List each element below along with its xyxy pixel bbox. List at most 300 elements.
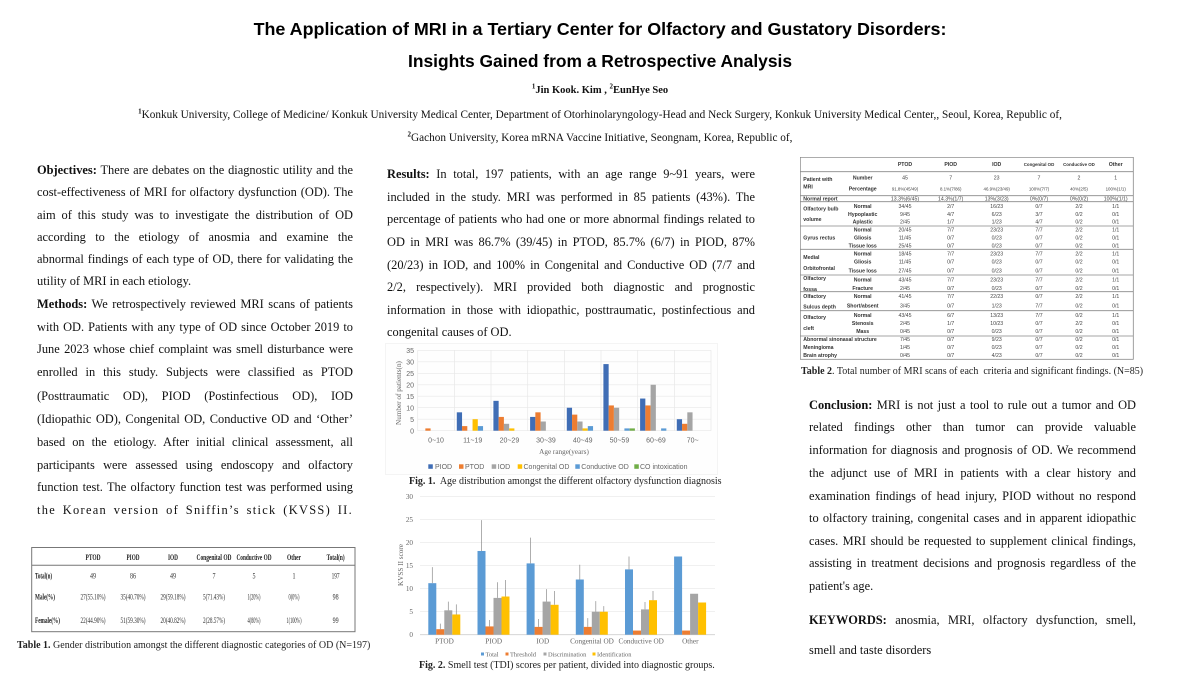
table 2 data rows: 1/1 (1112, 313, 1119, 319)
table 2 data rows: 0/7 (947, 353, 954, 359)
table 2 data rows: Aplastic (853, 220, 873, 226)
text block: keywords (809, 613, 1136, 657)
table 2 data rows: 7/7 (947, 278, 954, 284)
figure 2 legend (481, 651, 632, 658)
text block: methods: based on the etiology. After initial clinical assessment, all (37, 435, 353, 449)
table 2 data rows: 7/7 (1035, 252, 1043, 258)
table 2 data rows: 0/7 (1035, 329, 1043, 335)
figure 1 legend: PTOD (465, 464, 484, 471)
figure 2 legend: Discrimination (548, 651, 587, 658)
figure 1 x axis: 70~ (687, 438, 699, 444)
table 2 data rows: 2/45 (900, 321, 910, 327)
table 2 data rows (847, 175, 1128, 359)
text block: results: included in the study. MRI was performed in 85 patients (43%). The (387, 190, 755, 204)
text block: objectives: Objectives: There are debates on the diagnostic utility and the (37, 163, 353, 177)
table 2 data rows: 0/1 (1112, 268, 1119, 274)
text block: methods: Methods: We retrospectively reviewed MRI scans of patients (37, 297, 353, 311)
table 2 data rows: 1/1 (1112, 278, 1119, 284)
table 2 data rows: 9/23 (992, 337, 1002, 343)
table 2 data rows: 0/2 (1075, 345, 1083, 351)
table 2 data rows: 2 (1078, 175, 1081, 181)
table 1 row: total: 49 (170, 572, 176, 580)
figure 1 y axis: Number of patients(n) (395, 360, 403, 425)
table 2 data rows: 7/7 (947, 252, 954, 258)
figure 2: smell test scores bar chart (397, 493, 715, 658)
table 2 row labels: cleft (803, 326, 814, 332)
table 2 data rows: 4/23 (992, 353, 1002, 359)
authors: 1Jin Kook. Kim , 2EunHye Seo (532, 82, 668, 96)
table 2 data rows: 0/1 (1112, 337, 1119, 343)
text block: conclusion: related findings other than tumor can provide valuable (809, 420, 1136, 434)
table 2 data rows: 23/23 (990, 228, 1003, 234)
figure 1 y axis: 0 (410, 428, 414, 435)
figure 1 legend: IOD (498, 464, 510, 471)
table 1 row: total: 1 (292, 572, 296, 580)
table 2 row labels: Olfactory bulb (803, 206, 838, 212)
figure 2 legend: Identification (597, 651, 632, 658)
table 2 data rows: 0/2 (1075, 212, 1083, 218)
table 2 data rows: 0/2 (1075, 304, 1083, 310)
table 2 data rows: 7/7 (947, 294, 954, 300)
table 2 data rows: 1 (1114, 175, 1117, 181)
figure 1 bars (425, 364, 693, 431)
table 2 data rows: 7/45 (900, 337, 910, 343)
table 2 data rows: Mass (856, 329, 869, 335)
table 1 row: male: 5(71.43%) (203, 592, 225, 602)
table 1 row: total: 7 (212, 572, 216, 580)
text block: methods: participants were assessed using endoscopy and olfactory (37, 458, 353, 472)
figure 1 legend (428, 464, 688, 471)
table 2 data rows: 91.8%(45/49) (892, 186, 919, 191)
table 2 header row: Congenital OD (1024, 162, 1054, 167)
table 2 data rows: 10/23 (990, 321, 1003, 327)
table 2 data rows: 0/2 (1075, 329, 1083, 335)
table 1 row: male (35, 592, 339, 602)
table 2 data rows: Stenosis (852, 321, 874, 327)
table 2 data rows: 0/7 (1035, 345, 1043, 351)
table 2 data rows: 0/1 (1112, 345, 1119, 351)
table 2 data rows: 0/7 (1035, 337, 1043, 343)
table 2 data rows: 1/7 (947, 220, 954, 226)
table 2 data rows: 7 (949, 175, 952, 181)
table 2 data rows: 0/23 (992, 345, 1002, 351)
table 2 data rows: 0/1 (1112, 220, 1119, 226)
text block: conclusion: patient's age. (809, 579, 873, 593)
figure 1 y axis: 15 (406, 394, 414, 401)
table 2 data rows: 0/7 (947, 286, 954, 292)
table 2 data rows: 0/2 (1075, 260, 1083, 266)
figure 2 y axis: 5 (409, 608, 413, 616)
table 1 row: male: 29(59.18%) (160, 592, 186, 602)
table 2 header row (898, 162, 1123, 168)
table 2 data rows: 0/23 (992, 236, 1002, 242)
figure 2 x axis: PTOD (435, 638, 454, 646)
figure 1 y axis: 35 (406, 348, 414, 355)
table 2 data rows: 18/45 (899, 252, 912, 258)
text block: conclusion: assisting in treatment decisions and prognosis regardless of the (809, 556, 1136, 570)
figure 2 legend: Threshold (510, 651, 537, 658)
table 2 row labels: Meningioma (803, 345, 834, 351)
table 2 data rows: 13/23 (990, 313, 1003, 319)
table 2 data rows: 0/1 (1112, 260, 1119, 266)
table 2 row labels: Brain atrophy (803, 353, 837, 359)
figure 1 x axis: 50~59 (610, 438, 629, 444)
table 2 data rows: 23 (994, 175, 1000, 181)
table 2 data rows: 34/45 (899, 204, 912, 210)
table 2 data rows: 40%(2/5) (1070, 186, 1088, 191)
text block: conclusion: to olfactory training, congenital cases and in apparent idiopathic (809, 511, 1136, 525)
text block: conclusion: the adjunct use of MRI in patients with a clear history and (809, 466, 1136, 480)
table 2 data rows: 0/7 (1035, 244, 1043, 250)
text block: objectives (37, 163, 353, 288)
figure 1 x axis: 30~39 (536, 438, 556, 444)
table 1 row: total: Total(n) (35, 572, 52, 580)
table 1 row: female: 22(44.90%) (80, 616, 106, 625)
figure 2 y axis: 15 (406, 562, 413, 570)
figure 1 x axis: 0~10 (428, 438, 444, 444)
text block: conclusion: information for diagnosis and prognosis of OD. We recommend (809, 443, 1136, 457)
figure 2 y axis: 20 (406, 539, 413, 547)
table 2 data rows: 0/2 (1075, 244, 1083, 250)
table 2 data rows: 43/45 (899, 313, 912, 319)
figure 2 x axis: IOD (536, 638, 549, 646)
table 2 data rows: 27/45 (899, 268, 912, 274)
table 2 row labels: Gyrus rectus (803, 236, 835, 242)
text block: results: Results: In total, 197 patients, with an age range 9~91 years, were (387, 167, 755, 181)
table 2 data rows: 0/7 (1035, 268, 1043, 274)
table 1 row: total (35, 572, 340, 580)
table 2 data rows: 0/7 (947, 268, 954, 274)
table 2 data rows: 13%(3/23) (985, 196, 1009, 202)
table 2 data rows: 0/2 (1075, 313, 1083, 319)
table 2 data rows: 0/7 (947, 337, 954, 343)
table 2 data rows: 0/23 (992, 329, 1002, 335)
figure 1 y axis: 25 (406, 371, 414, 378)
figure 2 bars with error bars (428, 520, 706, 635)
table 2 data rows: 2/2 (1075, 321, 1083, 327)
table 2 data rows: 0/7 (1035, 321, 1043, 327)
table 2 data rows: Percentage (849, 186, 877, 192)
table 2 data rows: 0/7 (947, 304, 954, 310)
table 2 data rows: 2/2 (1075, 204, 1083, 210)
figure 2 x axis (435, 638, 699, 646)
table 1 row: female: Female(%) (35, 616, 60, 625)
table 2 data rows: 0/1 (1112, 329, 1119, 335)
text block: conclusion: examination findings of head injury, PIOD without no respond (809, 489, 1136, 503)
table 2 data rows: 100%(1/1) (1106, 186, 1126, 191)
table 2 data rows: 0/7 (1035, 353, 1043, 359)
table 2 data rows: 1/1 (1112, 294, 1119, 300)
table 2: MRI findings (800, 157, 1134, 360)
text block: methods (37, 297, 353, 517)
text block: objectives: utility of MRI in each etiology. (37, 274, 191, 288)
figure 2 caption: Fig. 2. Smell test (TDI) scores per patient, divided into diagnostic groups. (419, 660, 715, 670)
table 2 data rows: 0/1 (1112, 353, 1119, 359)
table 2 header row: IOD (992, 162, 1002, 168)
table 1 row: female: 1(100%) (286, 616, 302, 625)
table 2 data rows: 0/45 (900, 353, 910, 359)
figure 2 y axis (397, 493, 413, 639)
figure 1 x axis: Age range(years) (539, 448, 589, 456)
figure 2 x axis: Congenital OD (570, 638, 614, 646)
table 1 row: total: 5 (252, 572, 256, 580)
text block: methods: the Korean version of Sniffin’s stick (KVSS) II. (37, 503, 353, 517)
table 2 data rows: 0/1 (1112, 236, 1119, 242)
figure 2 x axis: Conductive OD (619, 638, 664, 646)
table 2 data rows: Normal (854, 278, 872, 284)
table 1 header row: IOD (168, 553, 178, 562)
table 2 data rows: 2/2 (1075, 294, 1083, 300)
table 1 header row: Congenital OD (196, 553, 232, 562)
table 1 row: male: 1(20%) (248, 592, 261, 602)
table 2 data rows: 1/7 (947, 321, 954, 327)
table 1 row: male: 35(40.70%) (120, 592, 146, 602)
table 2 row labels: Medial (803, 255, 820, 261)
table 2 data rows: 0/1 (1112, 212, 1119, 218)
table 2 row labels: Patient with (803, 177, 832, 183)
table 2 data rows: Tissue loss (849, 244, 877, 250)
table 1 row: male: Male(%) (35, 592, 55, 602)
affiliations (138, 107, 1062, 144)
text block: methods: function test. The olfactory function test was performed using (37, 480, 353, 494)
figure 1 y axis: 20 (406, 382, 414, 390)
table 2 data rows: 0/7 (947, 345, 954, 351)
table 2 row labels: volume (803, 217, 822, 223)
table 2 data rows: 0/2 (1075, 337, 1083, 343)
table 2 data rows: 2/45 (900, 220, 910, 226)
table 1 row: female: 20(40.82%) (160, 616, 186, 625)
table 1 header row: PIOD (126, 553, 140, 562)
table 2 data rows: 2/2 (1075, 228, 1083, 234)
table 2 data rows: 14.3%(1/7) (938, 196, 964, 202)
table 2 data rows: 0/45 (900, 329, 910, 335)
affiliations: 2Gachon University, Korea mRNA Vaccine Initiative, Seongnam, Korea, Republic of, (408, 130, 792, 144)
table 2 data rows: 22/23 (990, 294, 1003, 300)
text block: results (387, 167, 755, 339)
table 1 row: total: 197 (332, 572, 340, 580)
text block: results: information in those with idiopathic, posttraumatic, postinfectious and (387, 303, 755, 317)
text block: results: congenital causes of OD. (387, 325, 512, 339)
table 1 header row: PTOD (86, 553, 100, 562)
table 2 data rows: 9/45 (900, 212, 910, 218)
figure 1 caption: Fig. 1. Age distribution amongst the different olfactory dysfunction diagnosis (409, 476, 722, 486)
table 1 header row: Total(n) (327, 553, 345, 562)
table 2 data rows: 43/45 (899, 278, 912, 284)
table 2 data rows: 1/1 (1112, 228, 1119, 234)
table 2 data rows: Normal (854, 313, 872, 319)
table 2 data rows: 1/45 (900, 345, 910, 351)
table 2 data rows: Normal (854, 204, 872, 210)
table 2 row labels: Olfactory (803, 276, 826, 282)
figure 2 legend: Total (486, 651, 499, 658)
table 1 row: total: 86 (130, 572, 136, 580)
figure 2 y axis: 25 (406, 516, 413, 524)
table 2 data rows: 0%(0/7) (1030, 196, 1048, 202)
table 2 data rows: 25/45 (899, 244, 912, 250)
table 2 data rows: 100%(1/1) (1104, 196, 1128, 202)
table 2 data rows: 0%(0/2) (1070, 196, 1088, 202)
table 2 data rows: 6/23 (992, 212, 1002, 218)
table 2 data rows: 0/7 (1035, 204, 1043, 210)
table 2 data rows: 0/1 (1112, 244, 1119, 250)
table 2 row labels: MRI (803, 184, 813, 190)
table 2 data rows: 2/45 (900, 286, 910, 292)
table 2 data rows: 0/7 (947, 260, 954, 266)
table 2 caption: Table 2. Total number of MRI scans of each criteria and significant findings. (N=85) (801, 366, 1143, 376)
table 2 data rows: 45 (902, 175, 908, 181)
table 2 data rows: 0/1 (1112, 286, 1119, 292)
table 2 data rows: 23/23 (990, 252, 1003, 258)
table 2 data rows: Fracture (852, 286, 873, 292)
figure 1 legend: CO intoxication (640, 464, 688, 471)
table 2 data rows: 0/7 (1035, 286, 1043, 292)
table 2 data rows: 0/2 (1075, 353, 1083, 359)
table 2 data rows: 11/45 (899, 236, 911, 242)
table 2 data rows: 46.9%(23/49) (984, 186, 1010, 191)
table 2 data rows: 8.1%(7/86) (940, 186, 962, 191)
table 2 data rows: Gliosis (854, 236, 871, 242)
table 1 row: male: 27(55.10%) (80, 592, 106, 602)
title: The Application of MRI in a Tertiary Center for Olfactory and Gustatory Disorders: (254, 19, 946, 39)
table 2 data rows: 20/45 (899, 228, 912, 234)
figure 1 legend: Congenital OD (524, 464, 569, 471)
table 2 data rows: 0/2 (1075, 286, 1083, 292)
table 2 data rows: 23/23 (990, 278, 1003, 284)
table 2 data rows: 1/23 (992, 304, 1002, 310)
table 2 header row: PTOD (898, 162, 912, 168)
table 2 data rows: 0/1 (1112, 321, 1119, 327)
text block: results: 2/2, respectively). MRI provided both diagnostic and prognostic (387, 280, 755, 294)
table 1 row: female (35, 616, 339, 625)
table 2 data rows: 7/7 (1035, 228, 1043, 234)
table 2 data rows: 7/7 (1035, 313, 1043, 319)
affiliations: 1Konkuk University, College of Medicine/ Konkuk University Medical Center, Department of Otorhinolaryngology-Head and Neck Surgery, Konkuk University Medical Center,, Seoul, Korea, Republic of, (138, 107, 1062, 121)
text block: conclusion: cases. MRI should be requested to supplement clinical findings, (809, 534, 1136, 548)
table 2 data rows: Gliosis (854, 260, 871, 266)
table 1 row: male: 98 (333, 592, 339, 602)
text block: conclusion (809, 398, 1136, 593)
table 1 row: female: 99 (333, 616, 339, 625)
table 2 data rows: Normal (854, 228, 872, 234)
table 2 data rows: 41/45 (899, 294, 912, 300)
table 2 header row: Conductive OD (1063, 162, 1095, 167)
table 2 data rows: 0/2 (1075, 220, 1083, 226)
table 2 data rows: 0/1 (1112, 304, 1119, 310)
table 2 data rows: 1/1 (1112, 204, 1119, 210)
table 2 data rows: Number (853, 175, 873, 181)
table 2 data rows: Short/absent (847, 304, 879, 310)
figure 2 x axis: Other (682, 638, 699, 646)
figure 1 x axis: 60~69 (646, 438, 666, 444)
figure 2 y axis: 10 (406, 585, 413, 593)
figure 1 y axis: 30 (406, 360, 414, 366)
text block: keywords: KEYWORDS: anosmia, MRI, olfactory dysfunction, smell, (809, 613, 1136, 627)
table 2 data rows: 0/2 (1075, 268, 1083, 274)
text block: methods: enrolled in this study. Subjects were classified as PTOD (37, 365, 353, 379)
table 2 data rows: 6/7 (947, 313, 954, 319)
table 2 data rows: 3/45 (900, 304, 910, 310)
figure 1 y axis: 5 (410, 417, 414, 424)
table 2 data rows: 2/7 (947, 204, 954, 210)
figure 1 x axis: 11~19 (463, 438, 482, 444)
table 2 data rows: 0/2 (1075, 236, 1083, 242)
text block: objectives: according to the etiology of anosmia and examine the (37, 230, 353, 244)
figure 1: age distribution bar chart (385, 343, 718, 475)
table 2 data rows: 7/7 (1035, 304, 1043, 310)
table 2 row labels: Olfactory (803, 315, 826, 321)
table 1 row: female: 4(80%) (248, 616, 261, 625)
table 2 row labels: fossa (803, 287, 817, 293)
figure 2 y axis: 0 (409, 631, 413, 639)
table 1 caption: Table 1. Gender distribution amongst the different diagnostic categories of OD (N=197) (17, 640, 370, 651)
table 2 data rows: 4/7 (1035, 220, 1043, 226)
table 2 data rows: 0/23 (992, 260, 1002, 266)
text block: results: percentage of patients who had one or more abnormal findings related to (387, 212, 755, 226)
table 2 row labels: Olfactory (803, 294, 826, 300)
table 1 header row: Other (287, 553, 301, 562)
table 1 row: female: 2(28.57%) (203, 616, 225, 625)
table 2 row labels: Sulcus depth (803, 304, 836, 310)
table 2 data rows: 3/7 (1035, 212, 1043, 218)
table 2 data rows: 2/2 (1075, 278, 1083, 284)
text block: objectives: aim of this study was to investigate the distribution of OD (37, 208, 353, 222)
table 1: gender distribution (31, 547, 356, 632)
title (254, 19, 946, 71)
table 2 data rows: 2/2 (1075, 252, 1083, 258)
table 1 row: male: 0(0%) (288, 592, 300, 602)
figure 1 x axis: 40~49 (573, 438, 593, 444)
figure 1 y axis (395, 348, 414, 435)
table 2 row labels: Orbitofrontal (803, 266, 836, 272)
table 2 data rows: 0/23 (992, 286, 1002, 292)
table 1 header row (86, 553, 345, 562)
table 2 data rows: 13.3%(6/45) (891, 196, 919, 202)
figure 1 x axis (428, 438, 699, 456)
table 2 data rows: 0/23 (992, 244, 1002, 250)
table 2 data rows: 0/7 (947, 244, 954, 250)
title: Insights Gained from a Retrospective Analysis (408, 51, 792, 71)
text block: methods: with OD. Patients with any type of OD since October 2019 to (37, 320, 353, 334)
table 2 data rows: 16/23 (990, 204, 1003, 210)
table 2 data rows: Normal (854, 252, 872, 258)
text block: objectives: abnormal findings of each type of OD, there for validating the (37, 252, 353, 266)
table 2 data rows: 0/23 (992, 268, 1002, 274)
table 2 data rows: 7/7 (947, 228, 954, 234)
figure 2 y axis: 30 (406, 493, 413, 501)
table 2 data rows: 0/7 (1035, 294, 1043, 300)
table 2 header row: PIOD (944, 162, 957, 168)
table 1 row: total: 49 (90, 572, 96, 580)
table 2 row labels (803, 177, 877, 359)
figure 1 y axis: 10 (406, 405, 414, 412)
table 2 data rows: 7/7 (1035, 278, 1043, 284)
table 2 header row: Other (1109, 162, 1123, 168)
table 2 data rows: Tissue loss (849, 268, 877, 274)
text block: methods: (Idiopathic OD), Congenital OD, Conductive OD and ‘Other’ (37, 412, 353, 426)
text block: objectives: cost-effectiveness of MRI for olfactory dysfunction (OD). The (37, 185, 353, 199)
table 1 row: female: 51(59.30%) (120, 616, 146, 625)
text block: keywords: smell and taste disorders (809, 643, 931, 657)
table 2 row labels: Normal report (803, 196, 838, 202)
table 2 data rows: 0/7 (947, 236, 954, 242)
text block: results: (20/23) in IOD, and 100% in Congenital and Conductive OD (7/7 and (387, 258, 755, 272)
table 2 data rows: 4/7 (947, 212, 954, 218)
table 2 data rows: 0/7 (947, 329, 954, 335)
table 2 data rows: 11/45 (899, 260, 911, 266)
table 2 data rows: 1/23 (992, 220, 1002, 226)
text block: methods: (Posttraumatic OD), PIOD (Postinfectious OD), IOD (37, 389, 353, 403)
table 2 data rows: 0/7 (1035, 236, 1043, 242)
